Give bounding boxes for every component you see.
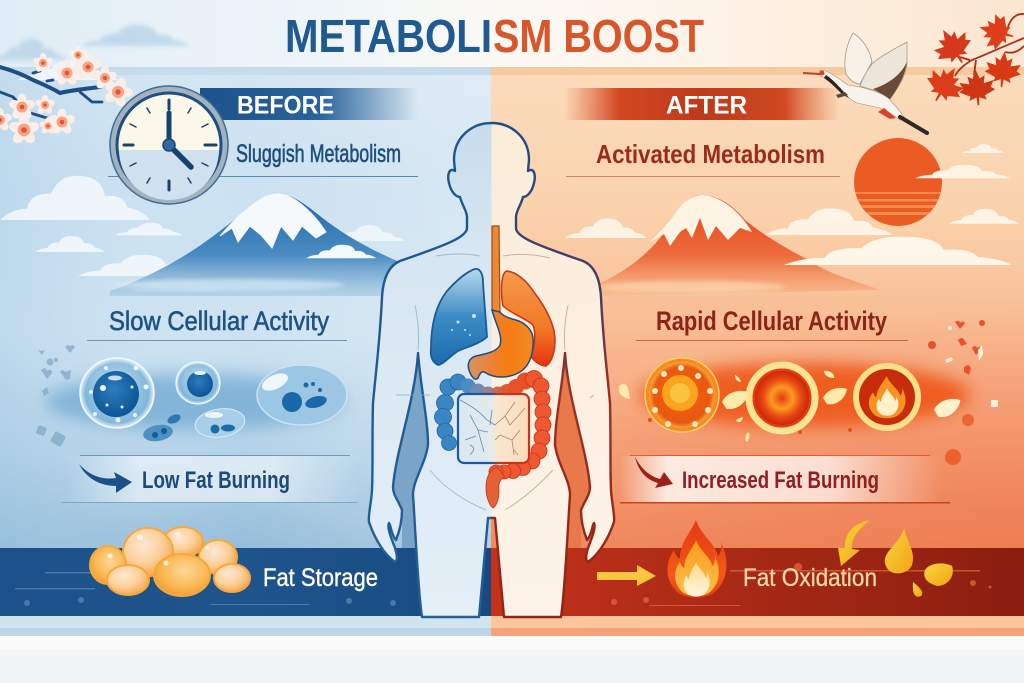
mountain: before [110,194,420,296]
clouds: after side [565,144,1019,238]
body figure [369,123,614,617]
banner: before [200,88,418,120]
esophagus [492,226,500,314]
header band [0,0,1024,70]
icon: clock [110,86,228,204]
cells: rapid [619,358,974,465]
bar: fat oxidation: Fat Oxidation [743,564,877,592]
icon: cherry blossom branch [0,46,138,146]
bar: fat storage [0,548,491,616]
increased fat burning row [618,455,950,504]
colon [434,370,551,508]
clouds: header wisps [0,25,190,60]
banner: after [564,88,840,120]
arrow: fat oxidation [597,565,656,586]
panel: before background [0,67,491,549]
low fat burning row: Low Fat Burning [142,467,290,494]
banner: after: AFTER [666,92,747,120]
slow cellular activity heading: Slow Cellular Activity [109,306,329,336]
cells: slow [45,358,347,443]
decorative fragments: after [928,320,998,407]
rapid cellular activity heading: Rapid Cellular Activity [656,306,887,336]
sluggish metabolism label: Sluggish Metabolism [236,140,401,168]
bar: fat oxidation [491,548,1024,616]
title: METABOLI [285,10,492,62]
title [285,10,704,62]
body right half [492,123,614,617]
sun [850,138,1010,226]
decorative fragments: before [36,345,75,447]
icon: maple branch [919,10,1024,110]
icon: flame [668,520,726,598]
anatomy detail lines [396,254,594,510]
arm gaps [393,353,590,548]
arrow: low fat burning [79,464,132,493]
clouds: before side [0,61,405,292]
stomach [468,310,533,379]
title: SM BOOST [493,10,704,62]
icon: oil droplets [885,528,953,597]
activated metabolism label: Activated Metabolism [596,139,825,169]
panel: after background [491,67,1024,549]
lung [431,269,487,365]
arrow: increased fat burning [635,457,673,488]
footer bands [0,616,1024,650]
bar: fat storage: Fat Storage [263,564,378,592]
mountain: after [590,195,1012,296]
fat deposits [90,527,250,596]
body left half [369,123,492,617]
increased fat burning row: Increased Fat Burning [682,467,879,494]
low fat burning row [62,455,360,503]
icon: curved arrow [838,520,870,566]
small intestine panel [458,394,529,463]
liver [502,271,555,366]
icon: crane [803,33,927,133]
banner: before: BEFORE [237,92,334,120]
